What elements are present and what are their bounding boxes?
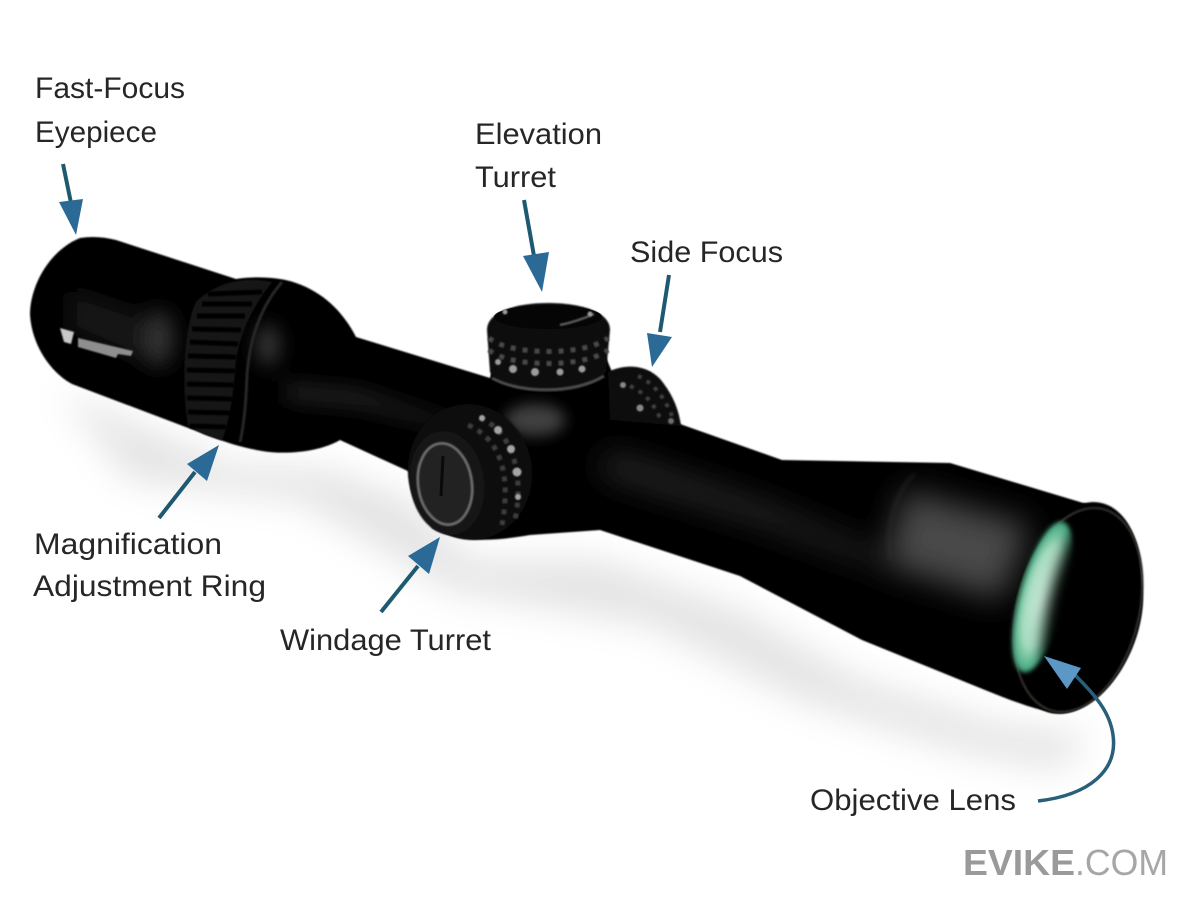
turret housing highlight — [505, 404, 565, 436]
side focus knob — [608, 367, 681, 426]
scope shadow — [60, 390, 1090, 770]
label: fast-focus eyepiece: Fast-Focus — [35, 72, 185, 105]
label: adjustment ring: Adjustment Ring — [33, 570, 266, 603]
riflescope — [30, 237, 1162, 728]
elevation turret — [487, 303, 610, 392]
label: objective lens: Objective Lens — [810, 784, 1016, 817]
arrow: windage turret — [381, 537, 440, 612]
label: turret: Turret — [475, 161, 557, 194]
arrow: fast-focus eyepiece — [59, 164, 83, 235]
watermark: evike.com: .COM — [1075, 842, 1168, 883]
arrow: objective lens — [1038, 656, 1114, 801]
arrow: magnification ring — [159, 445, 219, 518]
windage turret — [397, 394, 543, 550]
bell step line — [889, 473, 915, 560]
label: elevation: Elevation — [475, 118, 602, 151]
label: windage turret: Windage Turret — [280, 624, 492, 657]
lens inner shade — [1029, 507, 1121, 693]
watermark: evike.com: EVIKE — [963, 842, 1075, 883]
objective bell highlights — [600, 455, 1030, 600]
eyepiece highlights — [70, 290, 460, 430]
scope body silhouette — [30, 237, 1143, 713]
arrow: side focus — [647, 275, 672, 367]
lens housing — [990, 488, 1162, 728]
arrow: elevation turret — [523, 200, 549, 292]
icon: brand logo on eyepiece — [60, 328, 133, 358]
watermark: evike.com — [963, 842, 1168, 883]
green lens glass — [1000, 515, 1086, 679]
windage cap — [403, 426, 491, 540]
label: magnification: Magnification — [34, 528, 222, 561]
lens rim — [994, 494, 1162, 726]
magnification ring — [184, 280, 282, 442]
objective lens — [990, 488, 1162, 728]
label: side focus: Side Focus — [630, 236, 783, 269]
label: eyepiece line: Eyepiece — [35, 116, 157, 149]
